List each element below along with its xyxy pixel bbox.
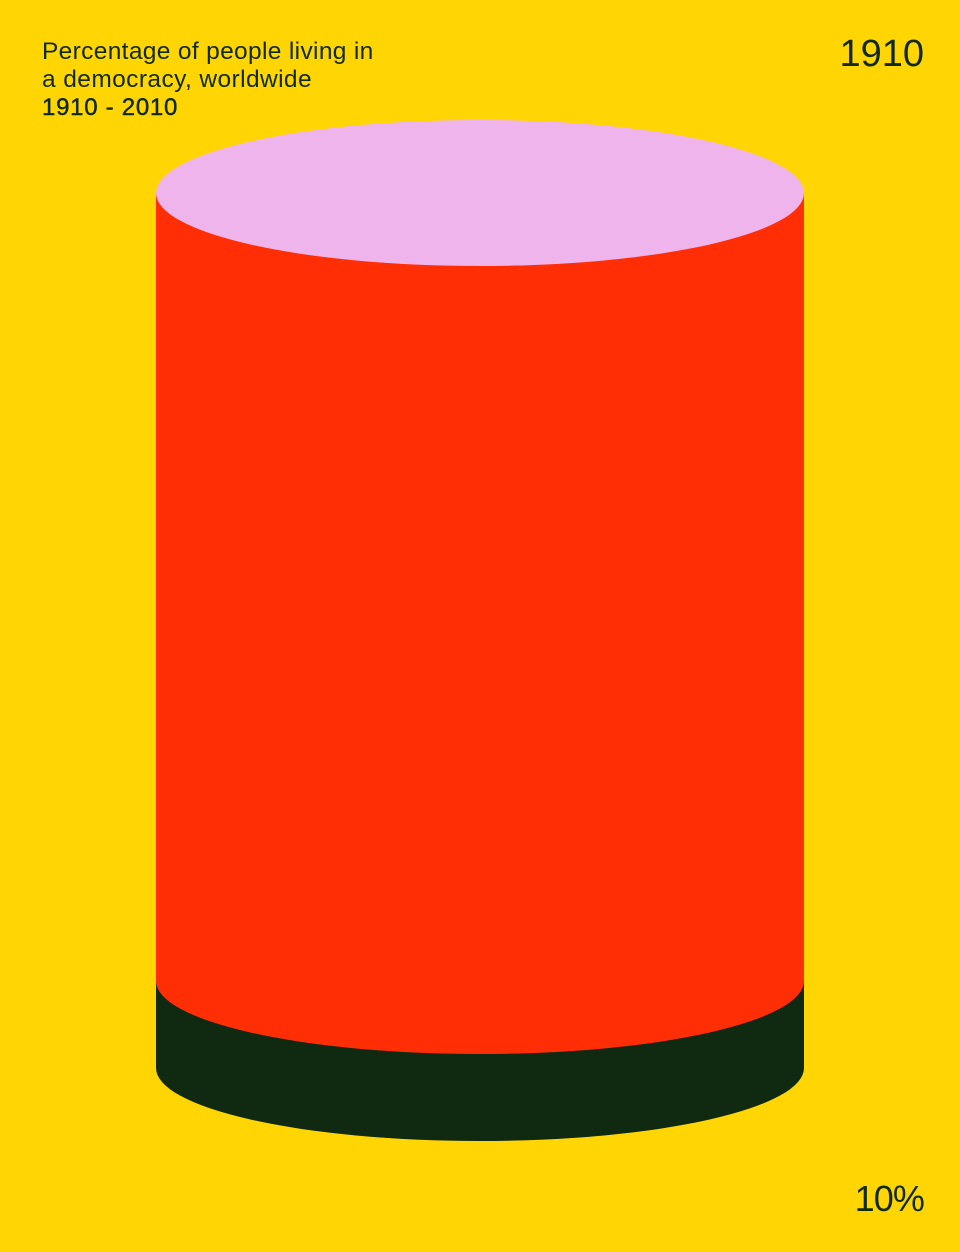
red segment: non-democracy share	[156, 193, 804, 1054]
title: a democracy, worldwide	[42, 66, 312, 93]
title	[42, 38, 374, 121]
dark segment: democracy share	[156, 975, 804, 1141]
title: Percentage of people living in	[42, 38, 374, 65]
percentage label: 10%	[855, 1178, 924, 1219]
title: 1910 - 2010	[42, 94, 178, 121]
year label: 1910	[839, 33, 924, 75]
cylinder top ellipse	[156, 120, 804, 266]
